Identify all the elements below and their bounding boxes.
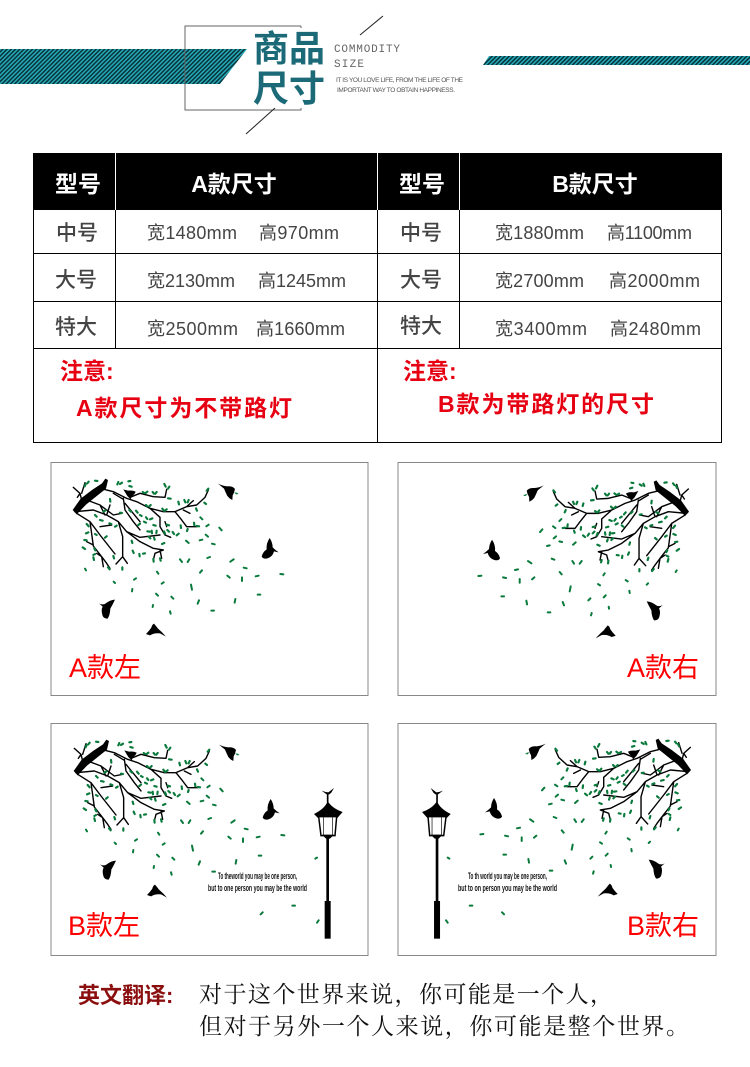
table grid — [33, 153, 722, 442]
quote B right: but to on person you may be the world — [458, 883, 557, 893]
row: large: 高1245mm — [258, 271, 346, 291]
title: 商品 — [253, 28, 325, 69]
table header row: 型号 — [399, 171, 445, 197]
tree artwork A right — [478, 480, 689, 638]
title — [250, 28, 326, 109]
row: medium: 中号 — [56, 222, 98, 245]
note B — [403, 358, 654, 417]
row: large: 宽2130mm — [147, 271, 235, 291]
row: extra large: 特大 — [55, 316, 97, 339]
note A: A款尺寸为不带路灯 — [76, 395, 292, 421]
row: large: 高2000mm — [609, 271, 700, 291]
quote B right: To th world you may be one person, — [468, 871, 547, 881]
table header row: B款尺寸 — [552, 171, 638, 197]
translation text: 对于这个世界来说，你可能是一个人， — [199, 982, 613, 1008]
header decoration left stripe — [0, 49, 247, 84]
note B: B款为带路灯的尺寸 — [438, 391, 654, 417]
size table — [33, 153, 722, 442]
note A — [60, 358, 292, 421]
row: medium: 宽1880mm — [495, 223, 584, 243]
label A right: A款右 — [627, 653, 699, 683]
row: extra large: 高1660mm — [256, 319, 345, 339]
english tagline: IMPORTANT WAY TO OBTAIN HAPPINESS. — [337, 87, 455, 94]
quote B left: To theworld you may be one person, — [218, 871, 297, 881]
row: extra large: 宽3400mm — [495, 319, 587, 339]
row: extra large — [55, 315, 701, 339]
translation text: 但对于另外一个人来说，你可能是整个世界。 — [199, 1014, 689, 1040]
english subtitle — [334, 44, 400, 71]
quote B left — [208, 871, 307, 893]
row: extra large: 宽2500mm — [147, 319, 238, 339]
translation label: 英文翻译: — [78, 983, 173, 1008]
translation text — [199, 982, 689, 1040]
row: large: 大号 — [55, 269, 97, 292]
table header row: A款尺寸 — [191, 171, 277, 197]
english tagline: IT IS YOU LOVE LIFE, FROM THE LIFE OF THE — [336, 77, 464, 84]
english tagline — [336, 77, 464, 94]
header decoration right stripe — [483, 56, 750, 65]
title frame — [185, 26, 301, 110]
panel: A right — [398, 462, 716, 696]
quote B left: but to one person you may be the world — [208, 883, 307, 893]
row: large — [55, 269, 700, 292]
tree artwork B right — [480, 739, 691, 897]
tree artwork A left — [73, 479, 283, 637]
label B left: B款左 — [68, 911, 140, 941]
row: extra large: 特大 — [400, 315, 442, 338]
row: medium: 中号 — [400, 222, 442, 245]
note B: 注意: — [403, 358, 457, 384]
panel: B right — [398, 724, 716, 956]
row: large: 大号 — [400, 269, 442, 292]
label A left: A款左 — [69, 653, 141, 683]
title: 尺寸 — [253, 68, 325, 109]
tree artwork B left — [74, 740, 284, 898]
row: large: 宽2700mm — [495, 271, 584, 291]
panel: A left — [51, 462, 368, 696]
table header row — [33, 153, 722, 210]
english subtitle: SIZE — [334, 59, 364, 71]
row: extra large: 高2480mm — [610, 319, 701, 339]
table header row: 型号 — [55, 171, 101, 197]
row: medium — [56, 222, 692, 245]
street lamp B left — [261, 788, 343, 939]
row: medium: 高1100mm — [607, 223, 692, 243]
row: medium: 高970mm — [259, 223, 339, 243]
street lamp B right — [422, 788, 504, 939]
accent line bottom — [246, 108, 275, 134]
accent line top — [360, 16, 383, 35]
row: medium: 宽1480mm — [147, 223, 237, 243]
quote B right — [458, 871, 557, 893]
panel: B left — [51, 724, 368, 956]
note A: 注意: — [60, 358, 114, 384]
label B right: B款右 — [627, 911, 699, 941]
english subtitle: COMMODITY — [334, 44, 400, 56]
